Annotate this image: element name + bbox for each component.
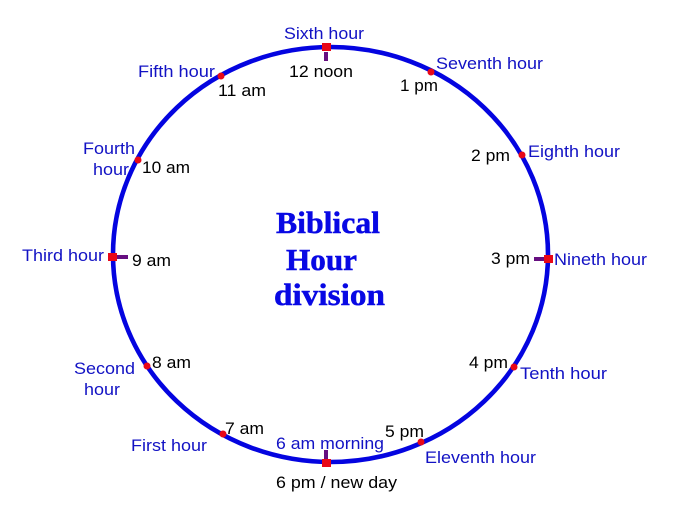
label: Second hour: Second [74, 359, 135, 378]
label: 7 am: 7 am [225, 419, 264, 438]
label: 11 am: 11 am [218, 81, 266, 100]
title: Biblical Hour division: Biblical [276, 205, 380, 240]
hour circle [113, 47, 548, 462]
label: Fourth hour: Fourth [83, 139, 135, 158]
label: 10 am: 10 am [142, 158, 190, 177]
label: 4 pm: 4 pm [469, 353, 508, 372]
label: 12 noon: 12 noon [289, 62, 353, 81]
title: Biblical Hour division: Hour [286, 242, 357, 277]
label: Fourth hour: hour [93, 160, 129, 179]
label: Fifth hour: Fifth hour [138, 62, 215, 81]
label: 9 am: 9 am [132, 251, 171, 270]
label: 1 pm: 1 pm [400, 76, 438, 95]
label: 3 pm: 3 pm [491, 249, 530, 268]
marker: 6 am [322, 450, 331, 467]
label: Seventh hour: Seventh hour [436, 54, 543, 73]
label: 6 am morning: 6 am morning [276, 434, 384, 453]
marker: sixth hour [322, 43, 331, 61]
label: 8 am: 8 am [152, 353, 191, 372]
marker: ninth hour [534, 255, 553, 263]
label: Second hour: hour [84, 380, 120, 399]
label: Fourth hour [83, 139, 135, 179]
hour dots [134, 68, 526, 446]
label: Eighth hour: Eighth hour [528, 142, 620, 161]
title: Biblical Hour division: division [274, 277, 385, 312]
label: Nineth hour: Nineth hour [554, 250, 647, 269]
label: 2 pm: 2 pm [471, 146, 510, 165]
label: Sixth hour: Sixth hour [284, 24, 364, 43]
label: Tenth hour: Tenth hour [520, 364, 607, 383]
label: Third hour: Third hour [22, 246, 104, 265]
label: 5 pm: 5 pm [385, 422, 424, 441]
label: 6 pm / new day: 6 pm / new day [276, 473, 398, 492]
label: Eleventh hour: Eleventh hour [425, 448, 536, 467]
label: Second hour [74, 359, 135, 399]
label: First hour: First hour [131, 436, 207, 455]
title: Biblical Hour division [274, 205, 385, 312]
marker: third hour [108, 253, 128, 261]
